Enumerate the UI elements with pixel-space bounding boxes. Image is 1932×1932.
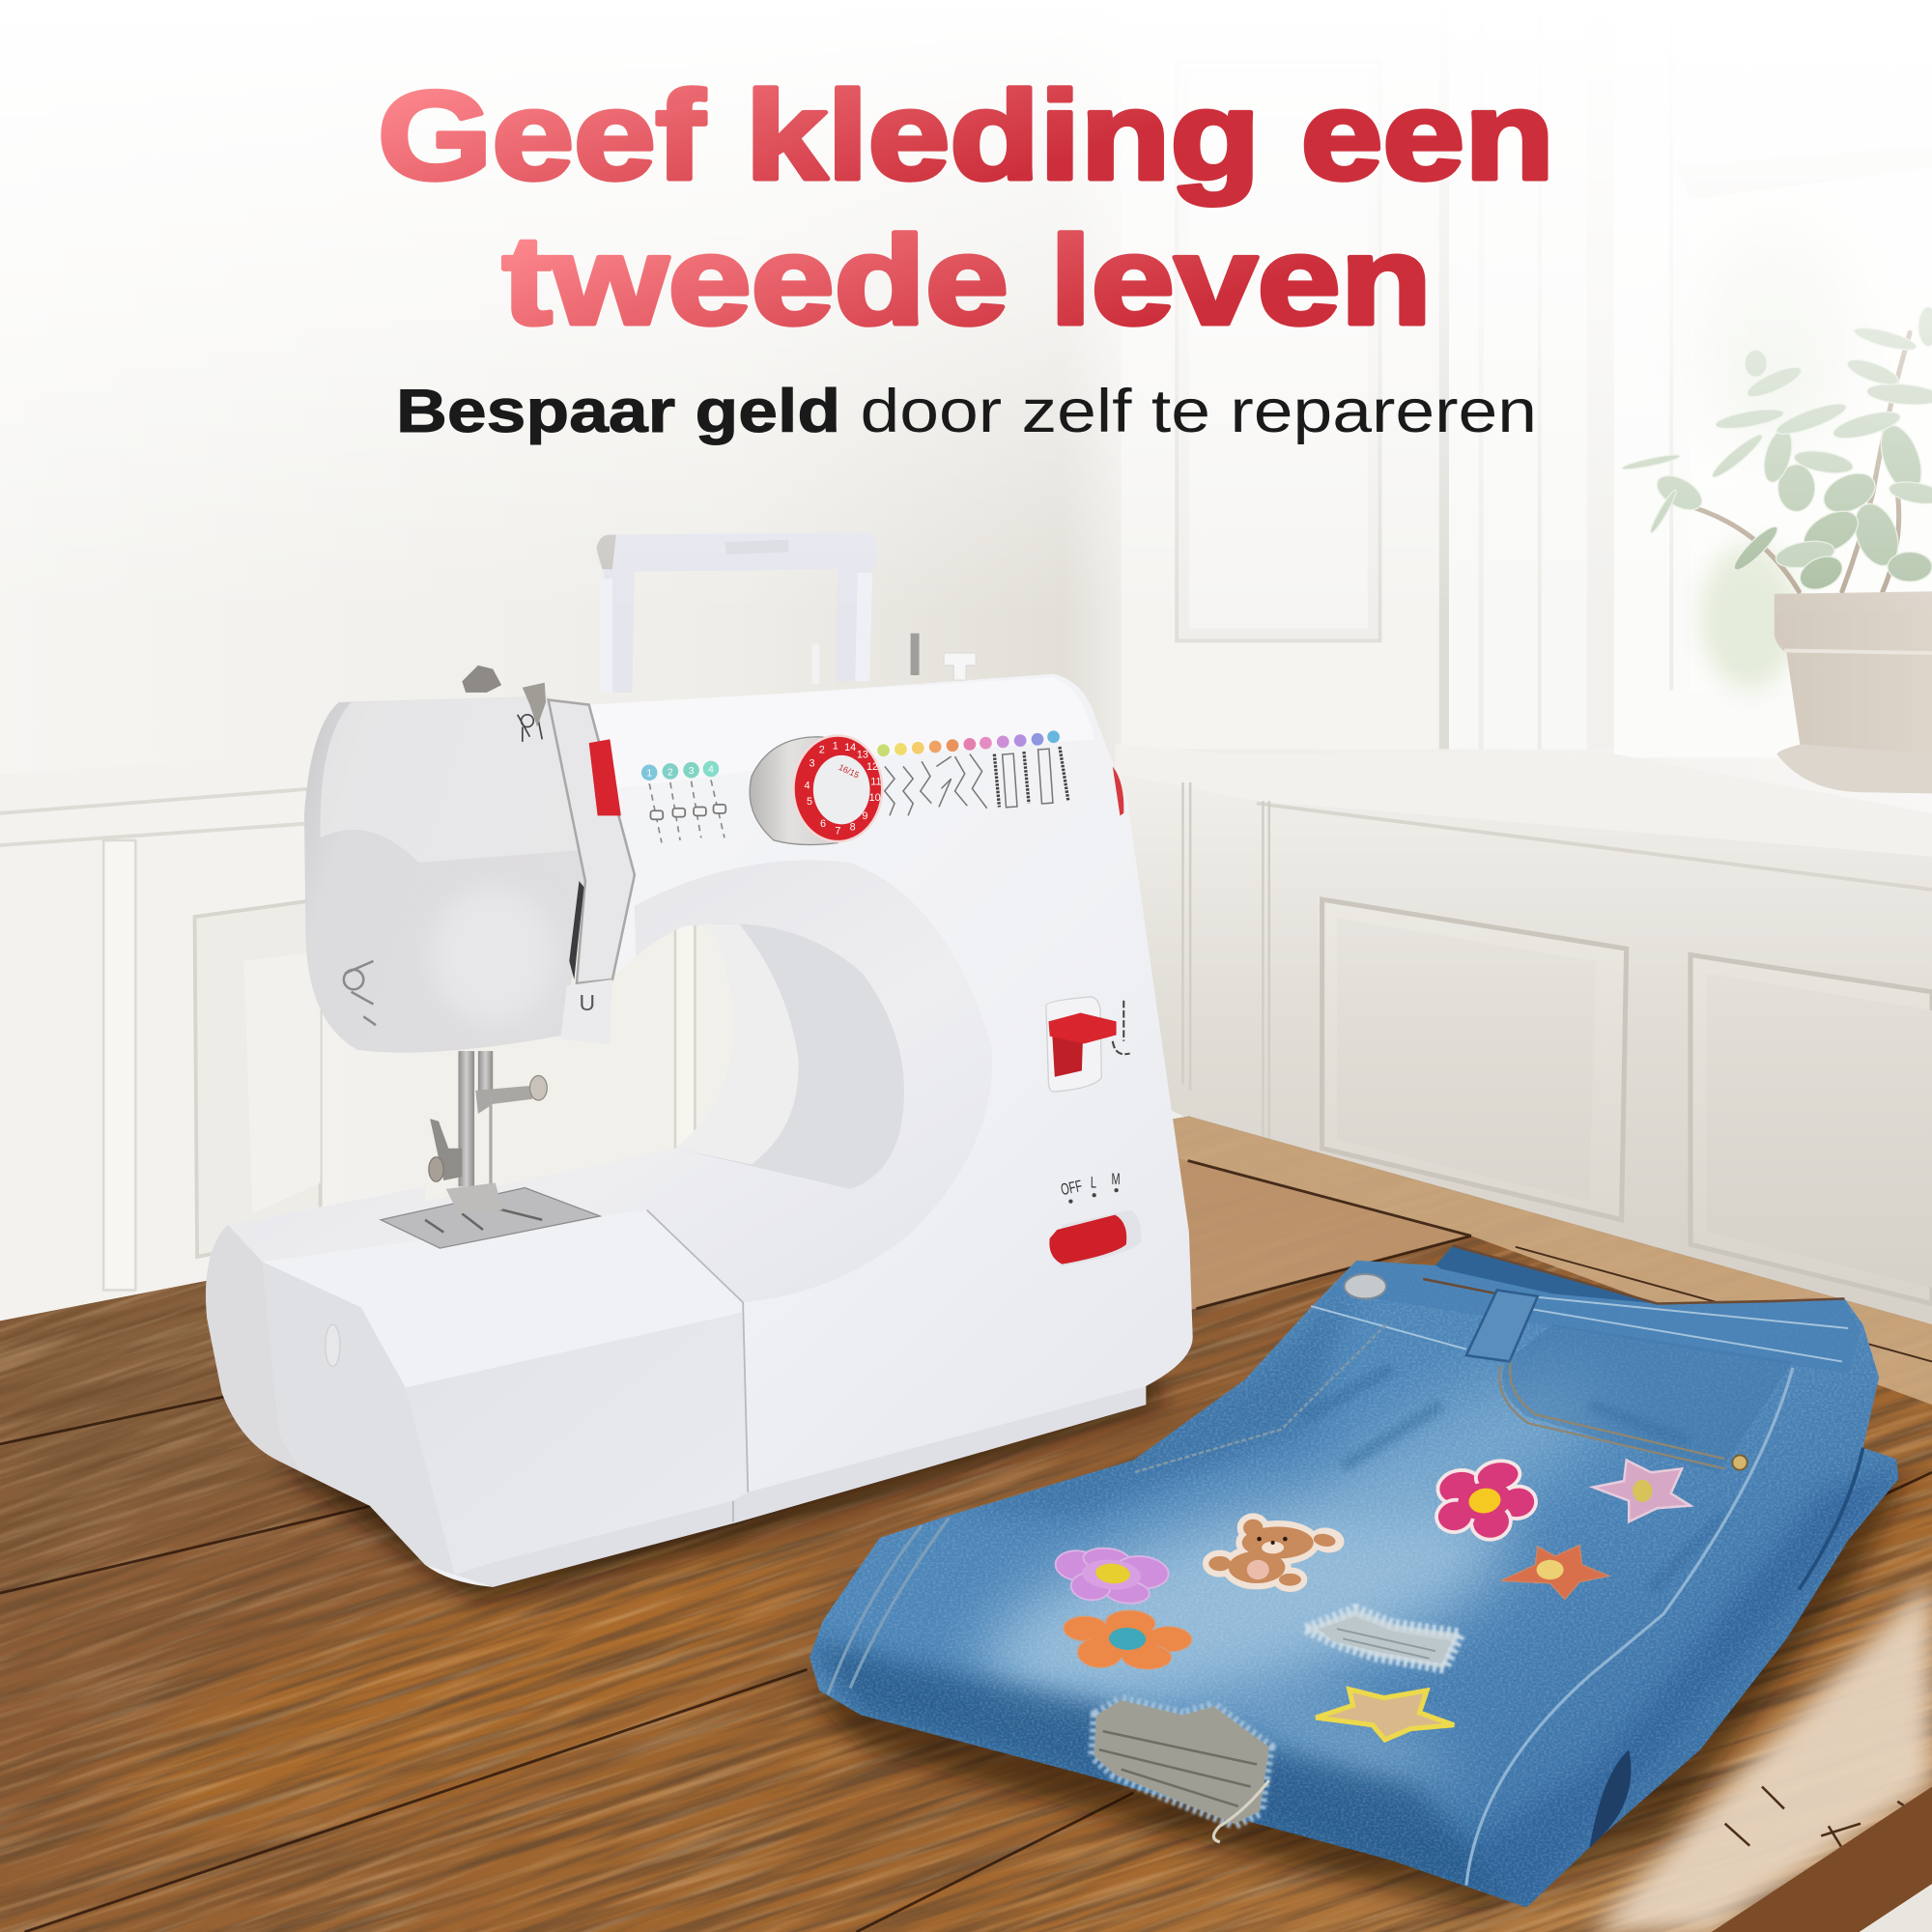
plant leaves — [1621, 307, 1932, 596]
tension sliders — [641, 761, 725, 842]
fly stitching — [1133, 1324, 1386, 1472]
upper tear — [1306, 1609, 1460, 1668]
window sill — [1115, 744, 1932, 856]
dial numbers: 14 — [844, 742, 856, 753]
presser lever — [430, 1119, 462, 1180]
power labels: M — [1112, 1171, 1121, 1188]
dial numbers: 8 — [850, 822, 856, 834]
jeans — [788, 1233, 1922, 1922]
slider tracks — [649, 780, 724, 842]
dial centre label: 16/15 — [838, 762, 861, 781]
title line 1: Geef kleding een — [378, 65, 1554, 206]
needle bar — [458, 1051, 474, 1186]
wood grain — [0, 1117, 1932, 1932]
orange star centre — [1537, 1560, 1564, 1579]
base seam — [647, 1210, 748, 1521]
top dark side — [949, 1282, 1355, 1516]
dial numbers: 7 — [835, 826, 840, 838]
orange star patch — [1501, 1545, 1609, 1600]
front pocket — [1502, 1324, 1793, 1472]
stitch patterns — [885, 747, 1068, 815]
bear belly — [1247, 1560, 1269, 1579]
face plate — [549, 699, 635, 983]
stitch length wheel — [589, 739, 621, 815]
plant stems — [1694, 332, 1910, 591]
denim twill noise — [788, 1233, 1922, 1922]
lit wood lower middle — [448, 1668, 931, 1930]
stitch pattern dots — [877, 730, 1060, 756]
plank seams — [0, 1161, 1932, 1932]
handle leg shade — [600, 573, 872, 693]
right dark folds — [1466, 1466, 1910, 1907]
power labels — [1060, 1171, 1121, 1200]
waistband stitching — [1311, 1296, 1848, 1361]
lilac flower patch — [1053, 1544, 1170, 1606]
top edge stitching — [1423, 1246, 1844, 1303]
base bottom rim — [455, 1386, 1146, 1587]
dial numbers: 6 — [820, 818, 826, 830]
fold shadows — [1306, 1368, 1725, 1589]
wooden table — [0, 1109, 1932, 1932]
tear threads — [1319, 1616, 1452, 1663]
dial numbers: 13 — [857, 749, 868, 760]
needle plate — [381, 1188, 600, 1248]
reverse lever recess — [1046, 997, 1101, 1092]
head lower highlight — [431, 887, 554, 1023]
arm swoop surface — [228, 861, 992, 1302]
front panel column — [589, 678, 1094, 788]
dial ring — [793, 735, 882, 841]
bobbin knob — [944, 653, 976, 680]
belt loop — [1466, 1290, 1538, 1361]
machine base front face — [406, 1312, 748, 1575]
side knob — [1113, 766, 1123, 815]
presser foot assembly — [381, 1051, 600, 1248]
threading marks — [344, 961, 376, 1025]
numbered dots: 3 — [689, 766, 695, 777]
side screw cap — [326, 1324, 340, 1367]
sewing machine — [206, 532, 1193, 1587]
handle grip detail — [724, 540, 788, 554]
power switch — [1049, 1215, 1126, 1264]
pot rim line — [1784, 650, 1932, 653]
u mark: U — [579, 990, 595, 1015]
tear fringe — [1094, 1700, 1269, 1824]
dial centre — [813, 755, 870, 824]
yellow star patch — [1316, 1690, 1454, 1740]
pink flower patch — [1429, 1456, 1542, 1548]
handle shade — [596, 535, 616, 569]
dial numbers: 12 — [867, 761, 878, 773]
inner waistband — [1435, 1246, 1658, 1303]
arch recess — [675, 923, 904, 1189]
machine body — [206, 674, 1193, 1587]
dial numbers: 3 — [810, 757, 815, 769]
left wainscoting — [0, 754, 321, 1321]
reverse icon — [1113, 1001, 1130, 1054]
dial numbers — [804, 741, 882, 838]
exposed threads — [1094, 1700, 1269, 1824]
foot screw — [429, 1157, 443, 1181]
power labels: L — [1091, 1174, 1096, 1192]
window shutter — [1122, 0, 1449, 750]
faded wash — [958, 1465, 1532, 1721]
machine head — [304, 696, 585, 1053]
plate marks — [425, 1208, 542, 1233]
denim base — [810, 1246, 1899, 1907]
second bar — [478, 1051, 493, 1094]
table scratches — [1723, 1785, 1905, 1847]
stitch selector dial — [750, 735, 882, 844]
pale planks behind jeans — [1179, 1159, 1470, 1310]
dial numbers: 4 — [804, 780, 810, 791]
bear eyes — [1257, 1537, 1288, 1545]
lower tear — [1094, 1700, 1269, 1842]
lower leg opening — [1589, 1749, 1631, 1848]
back right pale plank — [1158, 1109, 1932, 1405]
clamp — [475, 1086, 532, 1114]
right wainscoting — [1115, 774, 1932, 1324]
dial numbers: 10 — [869, 792, 881, 804]
dial numbers: 11 — [870, 776, 882, 787]
foot — [446, 1182, 502, 1213]
recess inner band — [675, 924, 799, 1164]
dial numbers: 1 — [833, 741, 838, 753]
metal spool pin — [911, 634, 920, 675]
head top facet — [320, 696, 582, 863]
white spool pin — [812, 644, 819, 684]
top fittings — [462, 634, 976, 727]
lit orange wood — [116, 1542, 815, 1837]
dial side — [750, 737, 850, 844]
thigh fade — [1337, 1362, 1602, 1499]
floor corner — [1860, 1884, 1932, 1932]
waistband — [1319, 1246, 1861, 1374]
reverse lever — [1048, 1012, 1117, 1043]
plate gap — [569, 881, 584, 980]
leg fold line — [1799, 1448, 1863, 1589]
slider knobs — [650, 805, 725, 819]
thread mark left — [518, 715, 542, 742]
title line 2: tweede leven — [502, 210, 1432, 351]
needle — [489, 1096, 493, 1195]
worn table corner — [1589, 1577, 1932, 1932]
rivet — [1732, 1455, 1747, 1470]
thread guide — [462, 666, 501, 693]
pink star patch — [1593, 1460, 1690, 1521]
side seam — [1466, 1368, 1793, 1886]
tear fringe — [1306, 1609, 1460, 1668]
star centre — [1633, 1480, 1652, 1502]
orange flower patch — [1063, 1608, 1192, 1670]
machine base side panel — [263, 1262, 455, 1575]
take up guide — [523, 683, 546, 727]
numbered dots: 4 — [708, 765, 714, 776]
machine base end facet — [206, 1225, 301, 1472]
power labels: OFF — [1060, 1178, 1084, 1200]
bear patch — [1208, 1518, 1341, 1587]
title — [378, 65, 1554, 351]
dial numbers: 5 — [807, 796, 812, 808]
reverse lever stem — [1052, 1033, 1083, 1077]
cuff dark — [801, 1638, 1528, 1910]
dial numbers: 2 — [819, 744, 825, 755]
machine shadow — [277, 1368, 1164, 1602]
cuff seam — [828, 1518, 949, 1694]
loose thread — [1213, 1780, 1269, 1842]
numbered dots — [641, 761, 719, 781]
machine base top sloped face — [263, 1210, 743, 1387]
power switch recess — [1060, 1210, 1142, 1266]
numbered dots: 1 — [646, 769, 652, 780]
throat opening — [616, 924, 728, 1149]
bear outline — [1208, 1518, 1341, 1587]
clamp knob — [529, 1076, 547, 1100]
button — [1345, 1274, 1386, 1298]
top white fade — [0, 0, 1932, 618]
bear muzzle — [1262, 1542, 1284, 1553]
jeans shadow — [801, 1479, 1910, 1910]
dial numbers: 9 — [862, 810, 867, 822]
numbered dots: 2 — [668, 767, 673, 778]
table front edge — [1712, 1786, 1932, 1932]
window frame — [1449, 0, 1932, 757]
dim left planks — [25, 1281, 205, 1316]
bear body — [1208, 1520, 1337, 1586]
pocket stitching — [1499, 1363, 1725, 1468]
pot — [1775, 591, 1932, 757]
handle — [597, 532, 877, 693]
pot saucer — [1776, 744, 1932, 793]
lower head block — [560, 980, 612, 1045]
potted plant — [1621, 307, 1932, 793]
knee fade — [1227, 1686, 1460, 1814]
switch position dots — [1068, 1188, 1119, 1204]
subtitle: Bespaar geld door zelf te repareren — [396, 378, 1537, 445]
